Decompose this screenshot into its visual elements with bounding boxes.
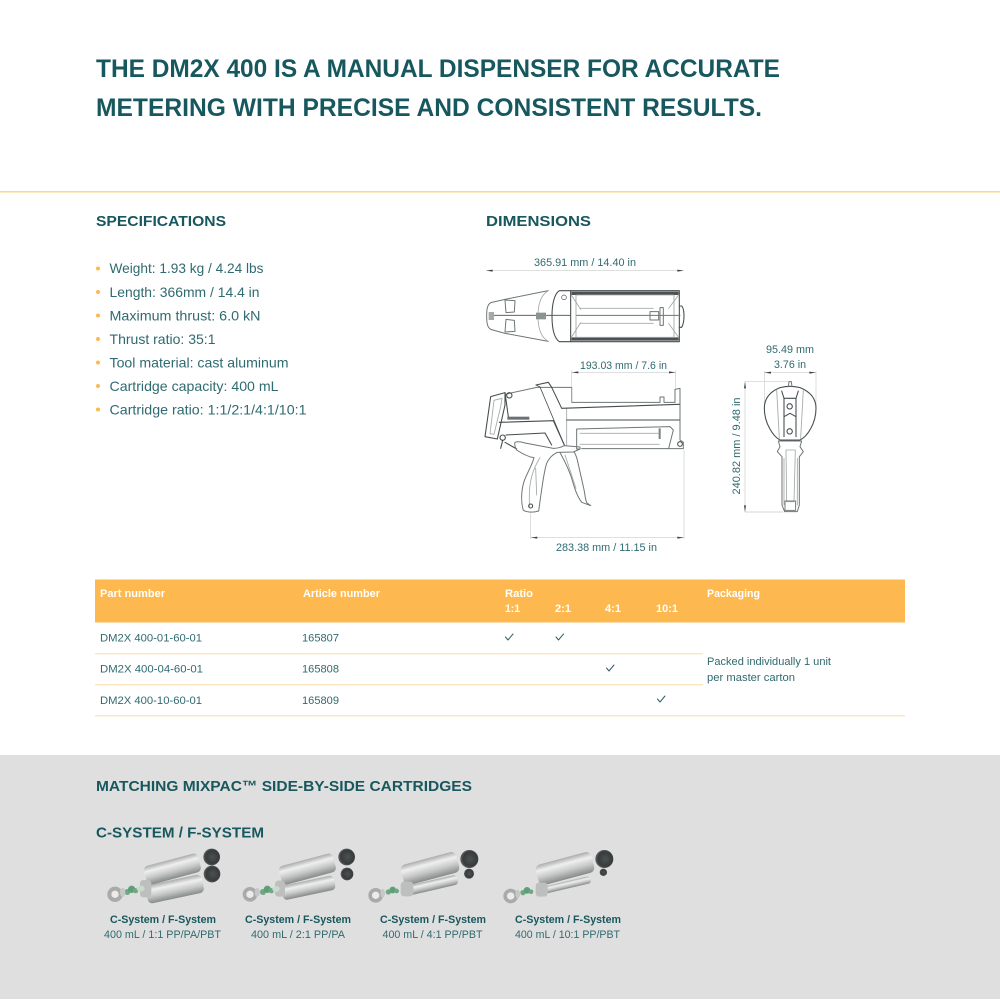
heading: dimensions: DIMENSIONS (486, 213, 591, 230)
label: total height: 240.82 mm / 9.48 in (731, 398, 743, 494)
icon: cartridge 4:1 (368, 850, 478, 903)
specification list: Maximum thrust: 6.0 kN (110, 308, 260, 324)
table row 1 (100, 632, 564, 644)
specification list: Length: 366mm / 14.4 in (110, 284, 260, 300)
table header (95, 580, 905, 622)
cartridge 10:1 caption: 400 mL / 10:1 PP/PBT (515, 929, 620, 941)
drawing: side view of dispenser (485, 370, 684, 539)
table header: 2:1 (555, 603, 571, 615)
table header: 10:1 (656, 603, 678, 615)
heading: matching cartridges: MATCHING MIXPAC™ SIDE-BY-SIDE CARTRIDGES (96, 778, 472, 795)
drawing: front view of dispenser (744, 371, 816, 512)
trigger (560, 452, 591, 506)
table row 2 (100, 664, 614, 676)
table row 3 (100, 695, 665, 707)
table row 3: DM2X 400-10-60-01 (100, 695, 202, 707)
heading: C-System / F-System: C-SYSTEM / F-SYSTEM (96, 824, 264, 842)
label: front width: 95.49 mm (766, 344, 814, 356)
drawing: top view of dispenser (486, 270, 684, 342)
table row 3: 165809 (302, 695, 339, 707)
icon: cartridge 10:1 (503, 850, 613, 903)
icon: cartridge 1:1 (107, 849, 220, 904)
heading: specifications: SPECIFICATIONS (96, 213, 226, 230)
panel: specifications (96, 213, 307, 418)
cartridge 1:1 caption: C-System / F-System (110, 914, 216, 926)
label: grip to nose length: 283.38 mm / 11.15 in (556, 542, 657, 554)
table header: 4:1 (605, 603, 621, 615)
table header: Ratio (505, 588, 533, 600)
table header: Packaging (707, 588, 760, 600)
cartridge 2:1 caption: 400 mL / 2:1 PP/PA (251, 929, 346, 941)
table header: Article number (303, 588, 381, 600)
table header: Part number (100, 588, 166, 600)
title: METERING WITH PRECISE AND CONSISTENT RESULTS. (96, 94, 762, 122)
panel: dimensions (485, 213, 816, 554)
label: front width: 3.76 in (774, 359, 806, 371)
cartridge 1:1 caption (104, 914, 221, 941)
table row 2: DM2X 400-04-60-01 (100, 664, 203, 676)
cartridge 4:1 caption: 400 mL / 4:1 PP/PBT (382, 929, 483, 941)
panel: matching cartridges (0, 755, 1000, 999)
specification list: Cartridge ratio: 1:1/2:1/4:1/10:1 (110, 402, 307, 418)
specification list: Thrust ratio: 35:1 (110, 331, 216, 347)
cartridge 1:1 caption: 400 mL / 1:1 PP/PA/PBT (104, 929, 221, 941)
specification list: Tool material: cast aluminum (110, 354, 288, 370)
cartridge 4:1 caption (380, 914, 486, 941)
title (96, 55, 780, 122)
label: overall length: 365.91 mm / 14.40 in (534, 257, 636, 269)
grip (515, 442, 580, 512)
cartridge 4:1 caption: C-System / F-System (380, 914, 486, 926)
specification list (96, 260, 307, 418)
table: part numbers (95, 580, 905, 716)
cartridge 2:1 caption (245, 914, 351, 941)
label: front width (766, 344, 814, 371)
table row 2: 165808 (302, 664, 339, 676)
title: THE DM2X 400 IS A MANUAL DISPENSER FOR ACCURATE (96, 55, 780, 83)
specification list: Cartridge capacity: 400 mL (110, 378, 279, 394)
packaging note: Packed individually 1 unit (707, 656, 831, 668)
table header: 1:1 (505, 603, 520, 615)
cartridge 2:1 caption: C-System / F-System (245, 914, 351, 926)
label: barrel length: 193.03 mm / 7.6 in (580, 360, 667, 372)
table row 1: DM2X 400-01-60-01 (100, 632, 202, 644)
icon: cartridge 2:1 (243, 849, 355, 902)
packaging note (707, 656, 831, 684)
cartridge 10:1 caption (515, 914, 621, 941)
specification list: Weight: 1.93 kg / 4.24 lbs (110, 260, 264, 276)
cartridge 10:1 caption: C-System / F-System (515, 914, 621, 926)
table row 1: 165807 (302, 632, 339, 644)
packaging note: per master carton (707, 672, 795, 684)
